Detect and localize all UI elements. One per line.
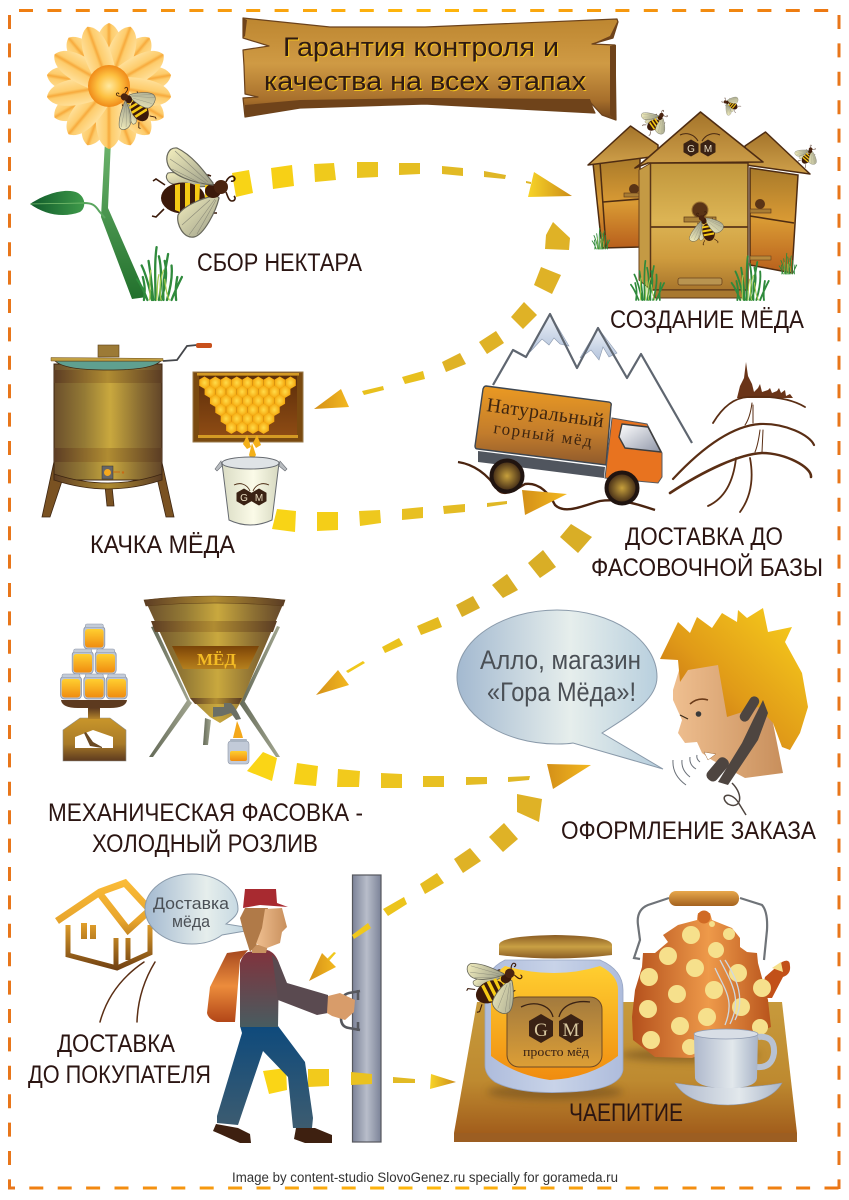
phone handset xyxy=(704,694,768,785)
label: mechanical packing xyxy=(48,799,363,858)
GM logo: G xyxy=(534,1020,548,1041)
tap xyxy=(213,703,241,720)
honey label xyxy=(172,646,259,669)
backpack xyxy=(207,950,248,1022)
stem xyxy=(101,140,147,299)
bee on jar xyxy=(456,945,534,1025)
leaf stalk xyxy=(84,203,105,218)
small jar xyxy=(228,739,249,764)
honey jar xyxy=(456,935,623,1093)
wire handle xyxy=(634,898,767,960)
chassis xyxy=(478,451,605,478)
cup handle xyxy=(757,1037,774,1067)
bucket xyxy=(215,457,287,525)
saucer xyxy=(675,1083,782,1105)
legs xyxy=(149,626,280,757)
GM logo: M xyxy=(563,1020,580,1041)
speech bubble: delivery: Доставка xyxy=(153,894,230,913)
hopper filling machine: МЁД xyxy=(197,650,236,669)
lid bar xyxy=(51,358,163,361)
drum xyxy=(54,364,162,480)
label: delivery to customer: ДО ПОКУПАТЕЛЯ xyxy=(28,1061,211,1089)
torso xyxy=(240,950,279,1027)
knob xyxy=(698,910,710,924)
cone xyxy=(146,602,284,723)
courier xyxy=(207,889,355,1143)
label: mechanical packing: ХОЛОДНЫЙ РОЗЛИВ xyxy=(92,828,318,858)
legs xyxy=(217,1026,313,1128)
label: honey making: СОЗДАНИЕ МЁДА xyxy=(610,306,804,334)
neck xyxy=(252,945,268,953)
label: delivery to packing base: ФАСОВОЧНОЙ БАЗЫ xyxy=(591,552,823,582)
label: delivery to packing base xyxy=(591,523,823,582)
label: delivery to customer: ДОСТАВКА xyxy=(57,1030,175,1058)
honeycomb cells xyxy=(199,376,296,434)
hive grass xyxy=(631,256,769,300)
shoes xyxy=(213,1124,332,1143)
hair xyxy=(660,608,808,750)
legs xyxy=(42,457,174,517)
window xyxy=(619,424,661,452)
table front edge xyxy=(454,1133,797,1142)
glass body xyxy=(485,960,623,1093)
hive GM logo: M xyxy=(704,144,712,155)
arrow: hopper to phone order xyxy=(247,752,591,789)
wooden grip xyxy=(669,891,739,906)
speech bubble: delivery: мёда xyxy=(172,912,210,931)
hand xyxy=(327,993,355,1020)
icon: large flying bee xyxy=(152,148,235,237)
hive GM logo xyxy=(680,134,720,156)
steam xyxy=(715,960,740,1025)
leaf xyxy=(30,191,84,215)
speech bubble: delivery xyxy=(145,874,257,944)
mouth xyxy=(704,752,716,760)
bee on flower xyxy=(103,77,166,138)
lid box xyxy=(98,345,119,357)
label: delivery to customer xyxy=(28,1030,211,1089)
jar stack xyxy=(60,624,127,699)
credit line: Image by content-studio SlovoGenez.ru specially for gorameda.ru xyxy=(232,1170,618,1185)
wooden board xyxy=(243,18,618,120)
icon: house xyxy=(57,883,150,968)
centre hive xyxy=(635,112,763,298)
arrow: phone to courier xyxy=(309,794,542,981)
red cap xyxy=(243,889,288,908)
man on the phone xyxy=(660,608,808,815)
board edge shading xyxy=(243,18,618,120)
honey drips xyxy=(243,435,261,461)
label: placing order: ОФОРМЛЕНИЕ ЗАКАЗА xyxy=(561,817,816,845)
lid xyxy=(499,935,612,958)
castle silhouette xyxy=(737,362,793,398)
tea table xyxy=(454,1002,797,1142)
label: delivery to packing base: ДОСТАВКА ДО xyxy=(625,523,783,551)
polka dots xyxy=(639,921,783,1055)
delivery truck xyxy=(458,386,662,510)
door post xyxy=(341,875,381,1142)
label: honey extraction: КАЧКА МЁДА xyxy=(90,531,235,559)
mountain outline xyxy=(493,314,692,443)
honeycomb frame xyxy=(193,372,303,461)
speech bubble: phone: «Гора Мёда»! xyxy=(487,677,636,707)
bucket GM logo: M xyxy=(255,493,263,504)
arrow: extractor to truck xyxy=(272,490,567,532)
truck text: Натуральный xyxy=(485,394,606,432)
GM logo xyxy=(521,1002,590,1043)
teal drum opening xyxy=(55,361,161,370)
bucket GM logo: G xyxy=(240,493,248,504)
grass tuft xyxy=(137,247,182,300)
label xyxy=(507,997,602,1067)
arm xyxy=(272,955,328,1015)
left hive xyxy=(588,126,658,249)
table top xyxy=(454,1002,797,1133)
table shadows xyxy=(487,1048,760,1100)
phone cord xyxy=(724,783,746,815)
snow caps xyxy=(530,314,569,352)
speech bubble: phone: Алло, магазин xyxy=(480,645,641,675)
honey stream xyxy=(233,721,243,738)
flower head xyxy=(45,22,173,150)
hair xyxy=(240,908,268,952)
label: tea drinking: ЧАЕПИТИЕ xyxy=(569,1099,683,1127)
arrow: road to hopper xyxy=(316,524,592,695)
arrow: hive to extractor xyxy=(314,222,570,409)
face and neck xyxy=(673,663,783,778)
hive bees xyxy=(636,91,823,248)
bucket GM logo xyxy=(234,484,269,505)
road and hills xyxy=(670,362,814,512)
road xyxy=(458,462,655,510)
right hive xyxy=(745,132,810,274)
jars on scale xyxy=(60,624,127,761)
mountains xyxy=(493,314,692,443)
hopper filling machine xyxy=(144,596,285,764)
band xyxy=(151,621,277,632)
road to house xyxy=(100,962,155,1022)
kettle body xyxy=(632,913,771,1058)
face xyxy=(256,908,287,948)
truck text xyxy=(485,394,606,451)
scale xyxy=(61,700,127,761)
cab xyxy=(605,418,662,483)
drum bands xyxy=(54,370,162,489)
hive GM logo: G xyxy=(687,144,695,155)
spout xyxy=(760,961,790,998)
flower xyxy=(30,22,182,300)
truck text: горный мёд xyxy=(492,418,593,451)
voice arcs xyxy=(673,755,700,785)
arrow: courier to table xyxy=(263,1068,456,1094)
honey extractor xyxy=(42,343,212,517)
arrow: bee to hive xyxy=(232,162,572,197)
crank xyxy=(163,343,212,361)
kettle xyxy=(632,891,790,1058)
eye and brow xyxy=(680,699,708,719)
title text: качества на всех этапах xyxy=(264,66,587,96)
beehives xyxy=(588,91,823,300)
title text xyxy=(264,32,587,96)
speech bubble: phone xyxy=(457,610,663,769)
control xyxy=(102,466,124,479)
label: nectar collection: СБОР НЕКТАРА xyxy=(197,249,362,277)
jar label text: просто мёд xyxy=(523,1044,589,1059)
cup body xyxy=(694,1034,758,1088)
title text: Гарантия контроля и xyxy=(283,32,559,62)
title sign xyxy=(243,18,618,120)
label: mechanical packing: МЕХАНИЧЕСКАЯ ФАСОВКА - xyxy=(48,799,363,827)
cargo box xyxy=(475,386,611,465)
door handle xyxy=(341,990,360,1031)
wheels xyxy=(492,460,638,504)
honey xyxy=(491,966,618,1080)
tea cup xyxy=(675,1029,782,1105)
